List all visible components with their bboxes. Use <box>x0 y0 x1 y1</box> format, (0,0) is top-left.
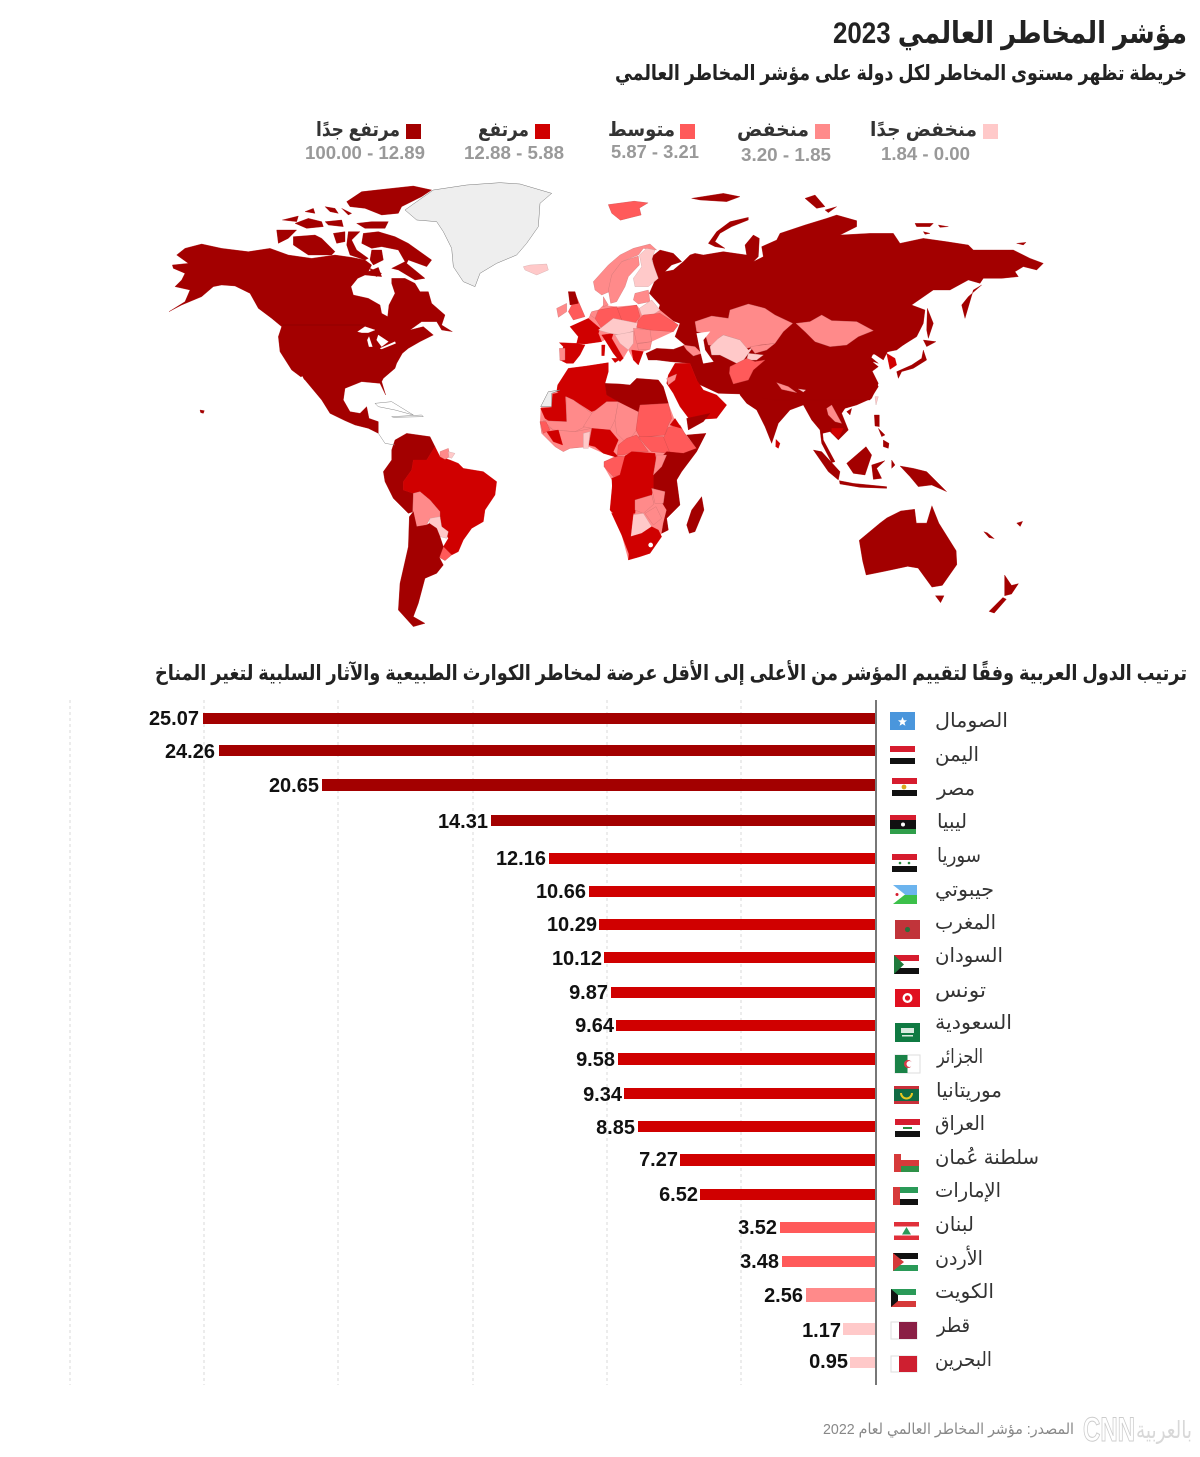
legend item: very low: 1.84 - 0.00 <box>881 144 970 164</box>
map: Svalbard and Oceania <box>608 201 1023 613</box>
row: Jordan: 3.48 <box>740 1251 779 1273</box>
map: Northern and Central Asia <box>646 193 1043 400</box>
Russia, China, Iran and Turkey landmass <box>646 215 1043 400</box>
row: Oman: 7.27 <box>639 1149 678 1171</box>
row: Lebanon: لبنان <box>935 1214 974 1236</box>
logo: CNN Arabic: CNN <box>1083 1411 1135 1449</box>
North America mainland <box>169 244 452 433</box>
row: Egypt <box>269 775 975 800</box>
legend item: low: 3.20 - 1.85 <box>741 145 831 165</box>
legend item: high: مرتفع <box>478 119 529 141</box>
legend item: medium <box>608 119 699 162</box>
row: Tunisia: تونس <box>935 980 986 1002</box>
row: UAE: الإمارات <box>935 1180 1001 1202</box>
Korea, Japan, Sakhalin, Kamchatka <box>887 285 982 378</box>
chart axis <box>875 700 877 1385</box>
flag: Mauritania <box>894 1086 919 1104</box>
row: Yemen: اليمن <box>935 744 979 766</box>
legend item: low <box>737 119 831 165</box>
Mongolia <box>796 315 873 347</box>
row: Bahrain: البحرين <box>935 1349 992 1371</box>
legend <box>305 119 998 165</box>
South America <box>383 433 497 627</box>
map: Greenland, Iceland, South America <box>383 183 552 627</box>
Iceland <box>523 264 548 275</box>
row: Qatar: قطر <box>936 1315 970 1337</box>
Sri Lanka <box>776 439 780 448</box>
row: Qatar <box>802 1315 970 1342</box>
row: Saudi Arabia: 9.64 <box>575 1015 615 1037</box>
Arctic islands <box>692 193 1026 248</box>
flag: Saudi Arabia <box>895 1023 920 1042</box>
map: South and Southeast Asia <box>740 340 947 492</box>
legend item: very low <box>870 119 998 164</box>
row: Lebanon: 3.52 <box>738 1217 777 1239</box>
row: Qatar: 1.17 <box>802 1320 841 1342</box>
flag: Oman <box>894 1154 919 1172</box>
row: Jordan: الأردن <box>935 1246 983 1270</box>
legend item: medium: 5.87 - 3.21 <box>611 142 699 162</box>
legend item: very high: مرتفع جدًا <box>316 119 400 141</box>
Caribbean and Central America outlines <box>200 402 423 445</box>
row: Syria: 12.16 <box>496 848 546 870</box>
legend item: medium: متوسط <box>608 119 675 141</box>
row: Saudi Arabia <box>575 1012 1012 1042</box>
row: Mauritania <box>583 1080 1002 1106</box>
map: North America <box>169 186 452 445</box>
world risk map <box>169 183 1043 627</box>
row: Yemen <box>165 741 979 766</box>
Australia and New Zealand <box>859 506 1023 613</box>
flag: Bahrain <box>891 1356 917 1372</box>
row: Kuwait: 2.56 <box>764 1285 803 1307</box>
row: Djibouti <box>536 879 994 904</box>
flag: Sudan <box>894 955 919 974</box>
flag: Yemen <box>890 746 915 764</box>
row: Iraq: 8.85 <box>596 1117 635 1139</box>
flag: Morocco <box>895 920 920 939</box>
row: Sudan: السودان <box>935 945 1003 967</box>
flag: Lebanon <box>894 1222 919 1240</box>
Svalbard <box>608 201 648 220</box>
row: Morocco <box>547 912 996 939</box>
row: Somalia <box>149 708 1008 732</box>
legend item: high <box>464 119 564 163</box>
flag: Somalia <box>890 712 915 730</box>
flag: UAE <box>893 1187 918 1205</box>
row: Sudan: 10.12 <box>552 948 602 970</box>
row: Libya: 14.31 <box>438 811 488 833</box>
row: UAE: 6.52 <box>659 1184 698 1206</box>
row: Tunisia: 9.87 <box>569 982 608 1004</box>
islands <box>813 397 947 492</box>
flag: Libya <box>890 815 916 834</box>
row: Morocco: المغرب <box>935 912 996 934</box>
Canadian Arctic islands <box>277 186 432 280</box>
row: Jordan <box>740 1246 983 1273</box>
row: Iraq: العراق <box>935 1113 985 1135</box>
flag: Iraq <box>895 1119 920 1137</box>
row: Libya <box>438 811 967 834</box>
row: Mauritania: 9.34 <box>583 1084 623 1106</box>
row: Morocco: 10.29 <box>547 914 597 936</box>
row: Libya: ليبيا <box>937 811 967 833</box>
row: Somalia: 25.07 <box>149 708 199 730</box>
row: Oman <box>639 1146 1039 1172</box>
flag: Djibouti <box>893 885 917 904</box>
row: Bahrain: 0.95 <box>809 1351 848 1373</box>
row: Yemen: 24.26 <box>165 741 215 763</box>
flag: Algeria <box>895 1055 920 1073</box>
map: Europe <box>557 244 678 365</box>
row: Egypt: مصر <box>936 778 975 800</box>
map: Africa and Arabia <box>540 363 727 560</box>
row: UAE <box>659 1180 1001 1206</box>
row: Algeria <box>576 1046 983 1073</box>
row: Iraq <box>596 1113 985 1139</box>
Laos <box>827 405 842 423</box>
row: Sudan <box>552 945 1003 974</box>
row: Egypt: 20.65 <box>269 775 319 797</box>
legend item: low: منخفض <box>737 119 809 141</box>
bar chart: Arab countries <box>70 700 1039 1385</box>
Central Asia <box>683 332 806 393</box>
flag: Kuwait <box>891 1289 916 1307</box>
flag: Egypt <box>892 778 917 796</box>
Cambodia <box>832 428 843 438</box>
legend item: very high <box>305 119 425 163</box>
logo: CNN Arabic <box>1083 1411 1192 1449</box>
row: Djibouti: جيبوتي <box>935 879 994 902</box>
row: Oman: سلطنة عُمان <box>935 1146 1039 1169</box>
row: Tunisia <box>569 980 986 1007</box>
legend item: very low: منخفض جدًا <box>870 119 977 141</box>
flag: Qatar <box>891 1322 917 1339</box>
source note: المصدر: مؤشر المخاطر العالمي لعام 2022 <box>823 1421 1074 1439</box>
row: Bahrain <box>809 1349 992 1373</box>
row: Somalia: الصومال <box>935 710 1008 732</box>
legend item: very high: 100.00 - 12.89 <box>305 143 425 163</box>
row: Algeria: الجزائر <box>936 1046 983 1068</box>
Greenland <box>405 183 552 287</box>
row: Syria <box>496 845 981 872</box>
flag: Tunisia <box>895 989 920 1007</box>
legend item: high: 12.88 - 5.88 <box>464 143 564 163</box>
flag: Jordan <box>893 1253 918 1271</box>
row: Kuwait <box>764 1281 994 1307</box>
Kazakhstan <box>695 304 793 348</box>
row: Syria: سوريا <box>937 845 981 867</box>
South Asia and China landmass <box>740 340 910 463</box>
row: Algeria: 9.58 <box>576 1049 615 1071</box>
row: Saudi Arabia: السعودية <box>935 1012 1012 1034</box>
flag: Syria <box>892 854 917 872</box>
row: Mauritania: موريتانيا <box>936 1080 1002 1102</box>
row: Lebanon <box>738 1214 974 1240</box>
row: Djibouti: 10.66 <box>536 881 586 903</box>
row: Kuwait: الكويت <box>935 1281 994 1303</box>
